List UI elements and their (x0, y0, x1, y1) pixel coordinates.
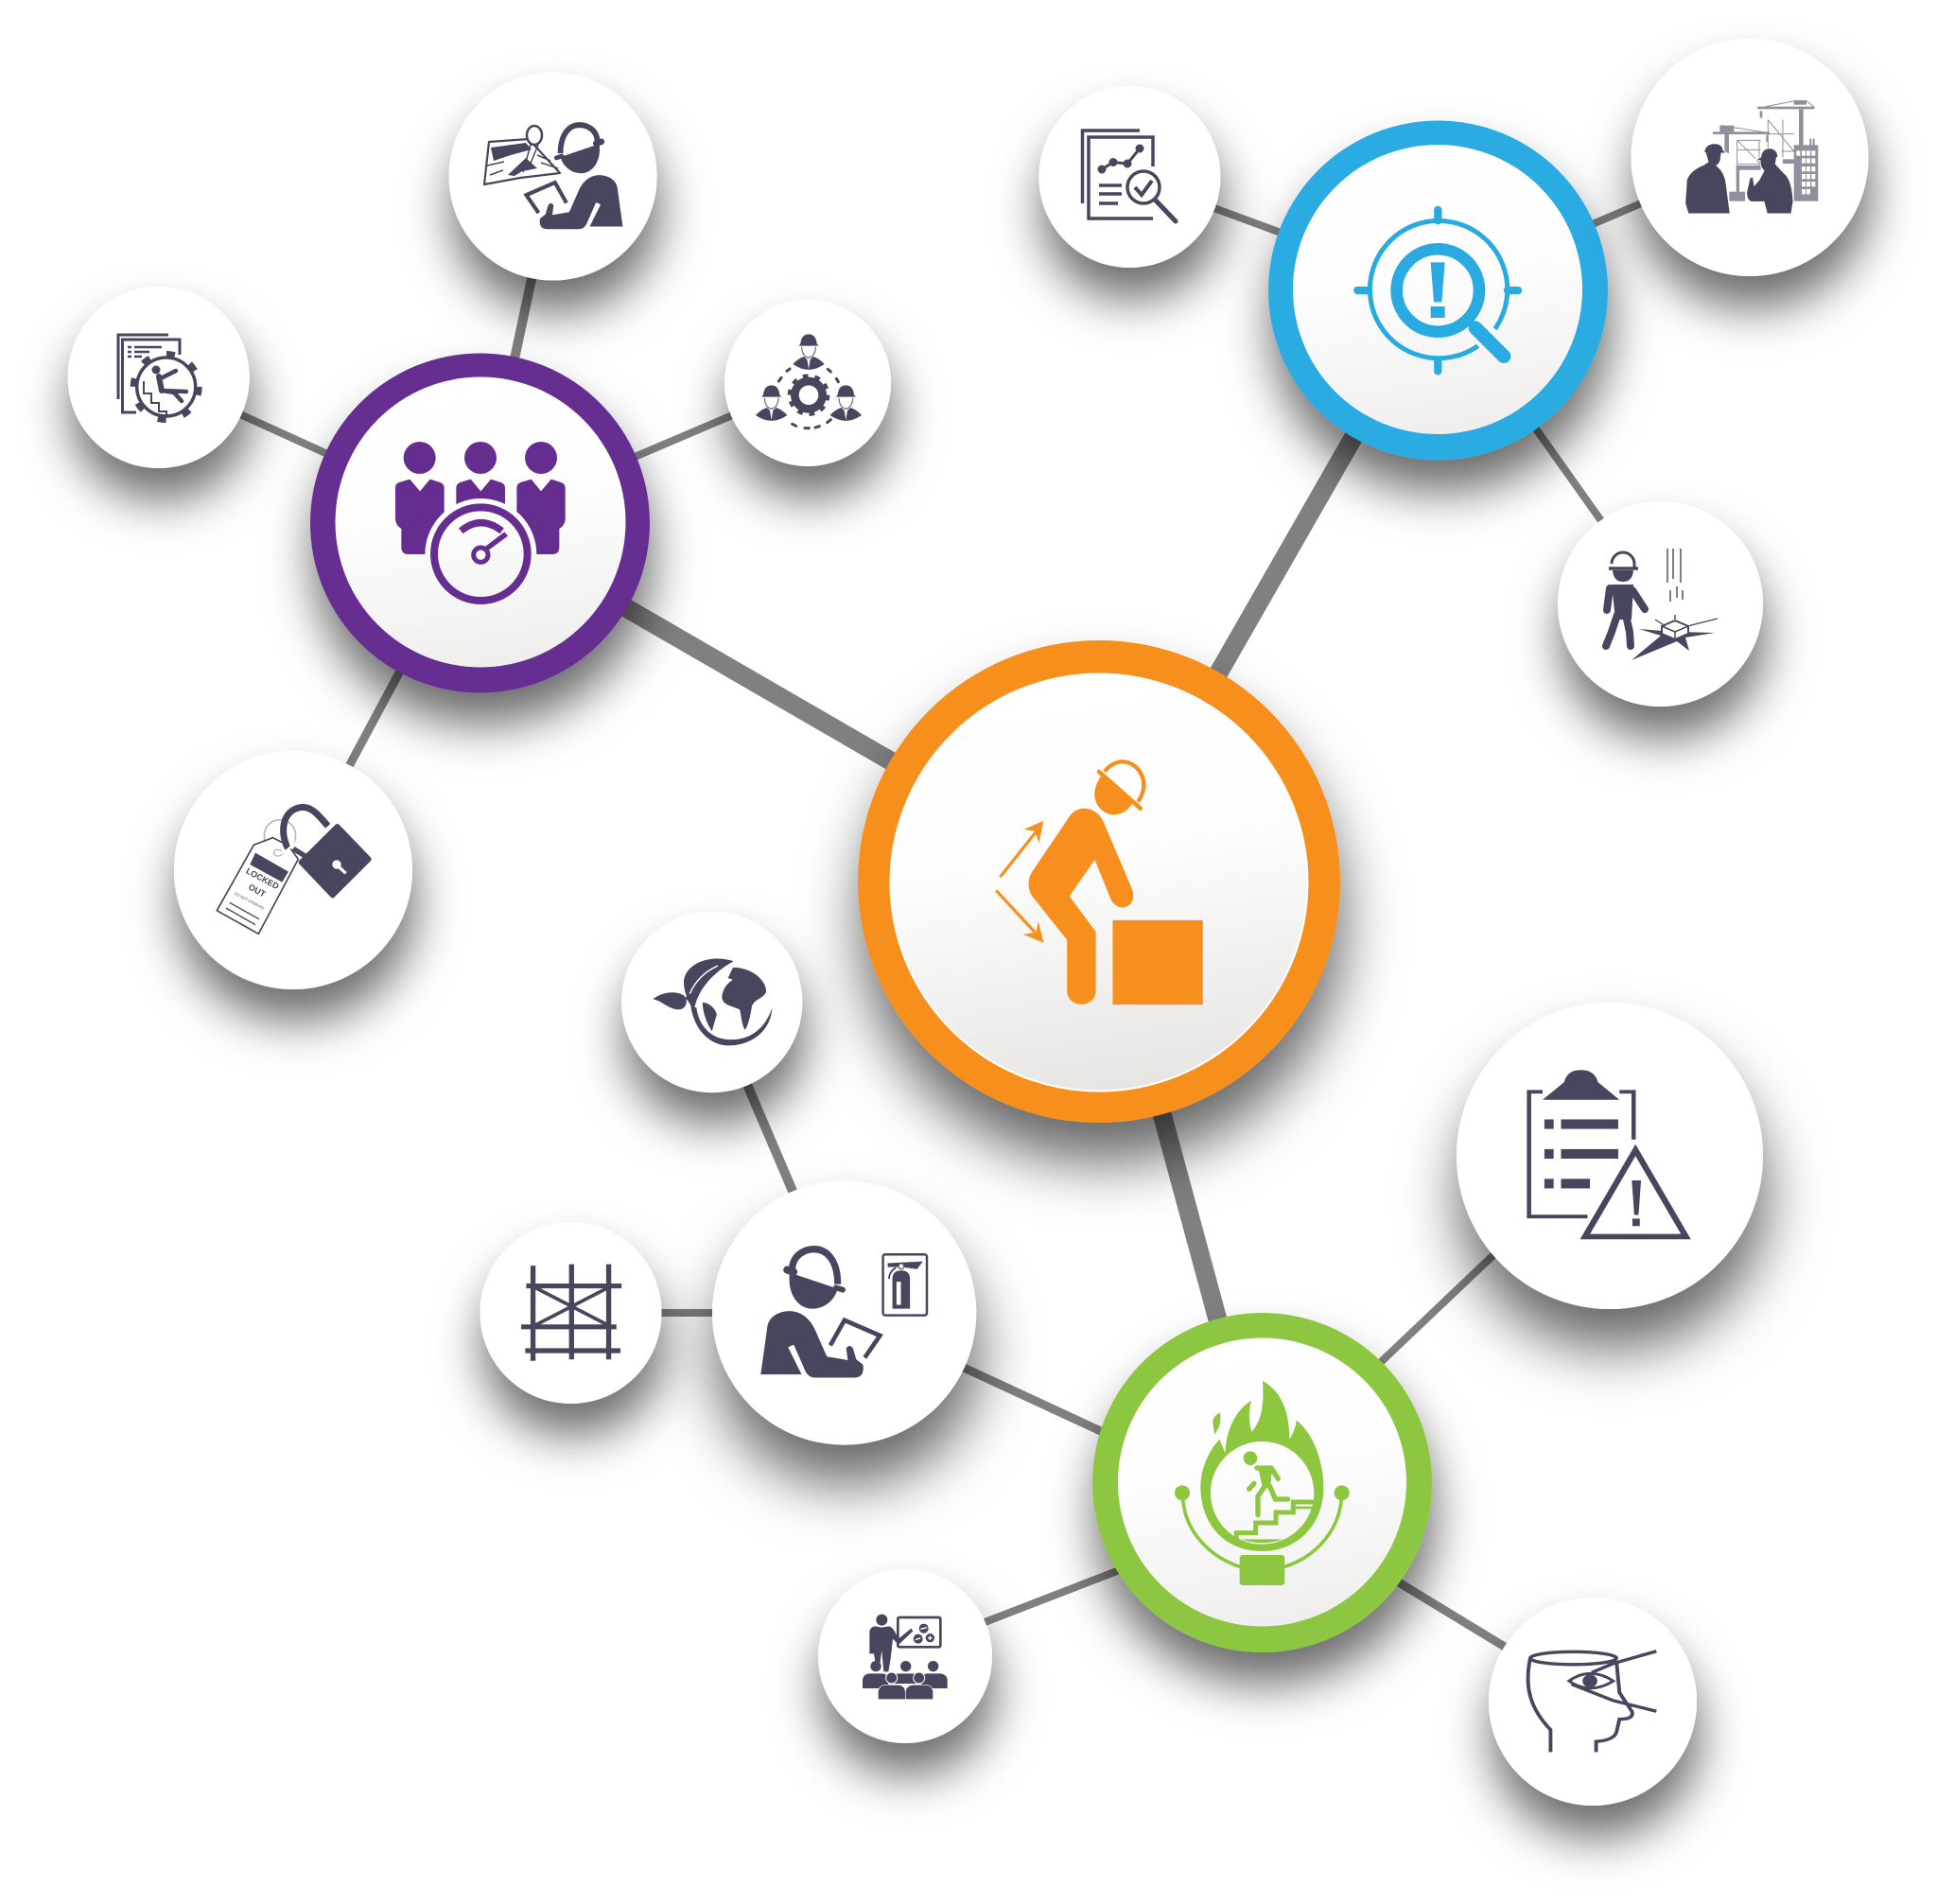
panel: head node (1489, 1598, 1697, 1806)
panel: training node (818, 1569, 992, 1743)
icon: team with gauge (395, 442, 566, 601)
connector: green to fire worker (899, 1337, 1182, 1469)
panel: globe node (621, 912, 802, 1092)
connector: orange to blue (1099, 290, 1438, 882)
icon: fire escape in flame (1175, 1381, 1350, 1585)
icon: target with magnifier and exclamation (1357, 210, 1518, 371)
connectors (159, 157, 1750, 1681)
connector: orange to green (1099, 882, 1262, 1482)
icon: worker and falling brick (1606, 549, 1718, 660)
panel: blue node (1268, 121, 1608, 460)
icon: padlock with locked out tag: LOCKED (244, 866, 281, 891)
connector: purple to team gear (480, 383, 808, 523)
icon: worker lifting box (996, 761, 1203, 1004)
connector: fire worker to scaffold (570, 1309, 845, 1317)
icon: two workers and construction site (1685, 100, 1818, 214)
icon: padlock with locked out tag: DO NOT OPERATE (234, 891, 266, 911)
icon: globe with leaves (653, 959, 772, 1045)
panel: central orange node (858, 640, 1340, 1123)
icon: padlock with locked out tag (217, 807, 369, 934)
panel: falling object node (1558, 501, 1763, 707)
connector: orange to purple (480, 523, 1099, 882)
connector: green to training (946, 1528, 1230, 1637)
icon: scaffold (521, 1265, 621, 1361)
connector: blue to chart document (1129, 177, 1438, 290)
panel: team gear node (724, 300, 891, 466)
icon: report with magnifier (1082, 131, 1176, 221)
panel: stairs document node (68, 287, 250, 468)
connector: green to clipboard (1324, 1200, 1551, 1416)
panel: scaffold node (480, 1222, 662, 1404)
connector: fire worker to globe (712, 1003, 845, 1313)
icon: presenter and audience (863, 1615, 948, 1700)
connector: purple to map worker (480, 177, 553, 523)
panel: clipboard node (1457, 1003, 1763, 1309)
connector: blue to construction (1438, 157, 1750, 290)
connector: purple to lockout (293, 523, 480, 870)
connector: green to head (1324, 1537, 1561, 1681)
panel: chart document node (1038, 86, 1220, 268)
panel: fire worker node (712, 1180, 976, 1445)
icon: worker with extinguisher sign (760, 1249, 927, 1377)
icon: workers around gear (756, 334, 862, 428)
icon: document with fall hazard gear (118, 335, 200, 420)
connector: purple to stairs document (159, 377, 480, 523)
icon: worker with map (484, 125, 622, 229)
panel: construction node (1631, 39, 1869, 276)
icon: padlock with locked out tag: OUT (247, 882, 268, 900)
icon: checklist with warning triangle (1529, 1070, 1686, 1236)
connector: blue to falling object (1438, 290, 1660, 603)
panel: green node (1092, 1313, 1432, 1652)
panel: lockout node (174, 751, 412, 989)
panel: purple node (310, 354, 650, 692)
icon: head with eye and slash (1528, 1651, 1656, 1752)
panel: map worker node (449, 72, 657, 280)
